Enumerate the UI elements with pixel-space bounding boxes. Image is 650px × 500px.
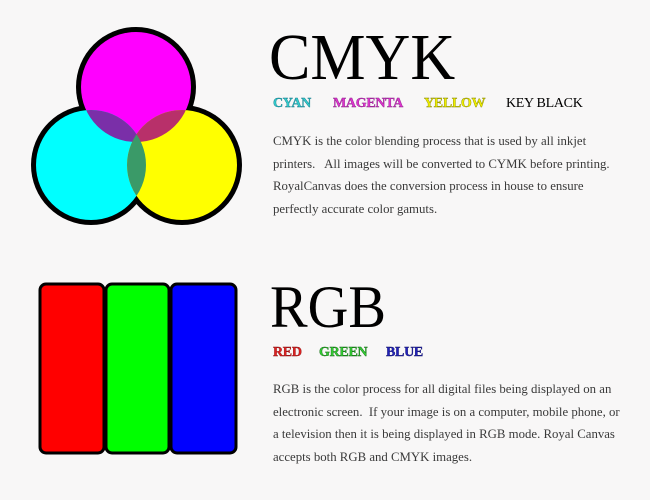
legend: CMYK colors (273, 96, 583, 111)
legend: CMYK colors: CYAN (273, 96, 311, 111)
icon: RGB bars (38, 282, 238, 454)
title: CMYK: CMYK (269, 21, 455, 94)
legend: CMYK colors: MAGENTA (333, 96, 403, 111)
legend: CMYK colors: YELLOW (424, 96, 485, 111)
title: RGB: RGB (270, 274, 386, 340)
legend: CMYK colors: KEY BLACK (506, 96, 583, 111)
text: CMYK description: CMYK is the color blending process that is used by all inkjet printers. All images will be converted to CYMK before printing. RoyalCanvas does the conversion process in house to ensure perfectly accurate color gamuts. (273, 134, 610, 216)
legend: RGB colors (273, 345, 423, 360)
text: RGB description: RGB is the color process for all digital files being displayed on an electronic screen. If your image is on a computer, mobile phone, or a television then it is being displayed in RGB mode. Royal Canvas accepts both RGB and CMYK images. (273, 382, 620, 464)
legend: RGB colors: RED (273, 345, 302, 360)
legend: RGB colors: GREEN (319, 345, 367, 360)
legend: RGB colors: BLUE (386, 345, 423, 360)
icon: CMYK circles (31, 27, 242, 225)
